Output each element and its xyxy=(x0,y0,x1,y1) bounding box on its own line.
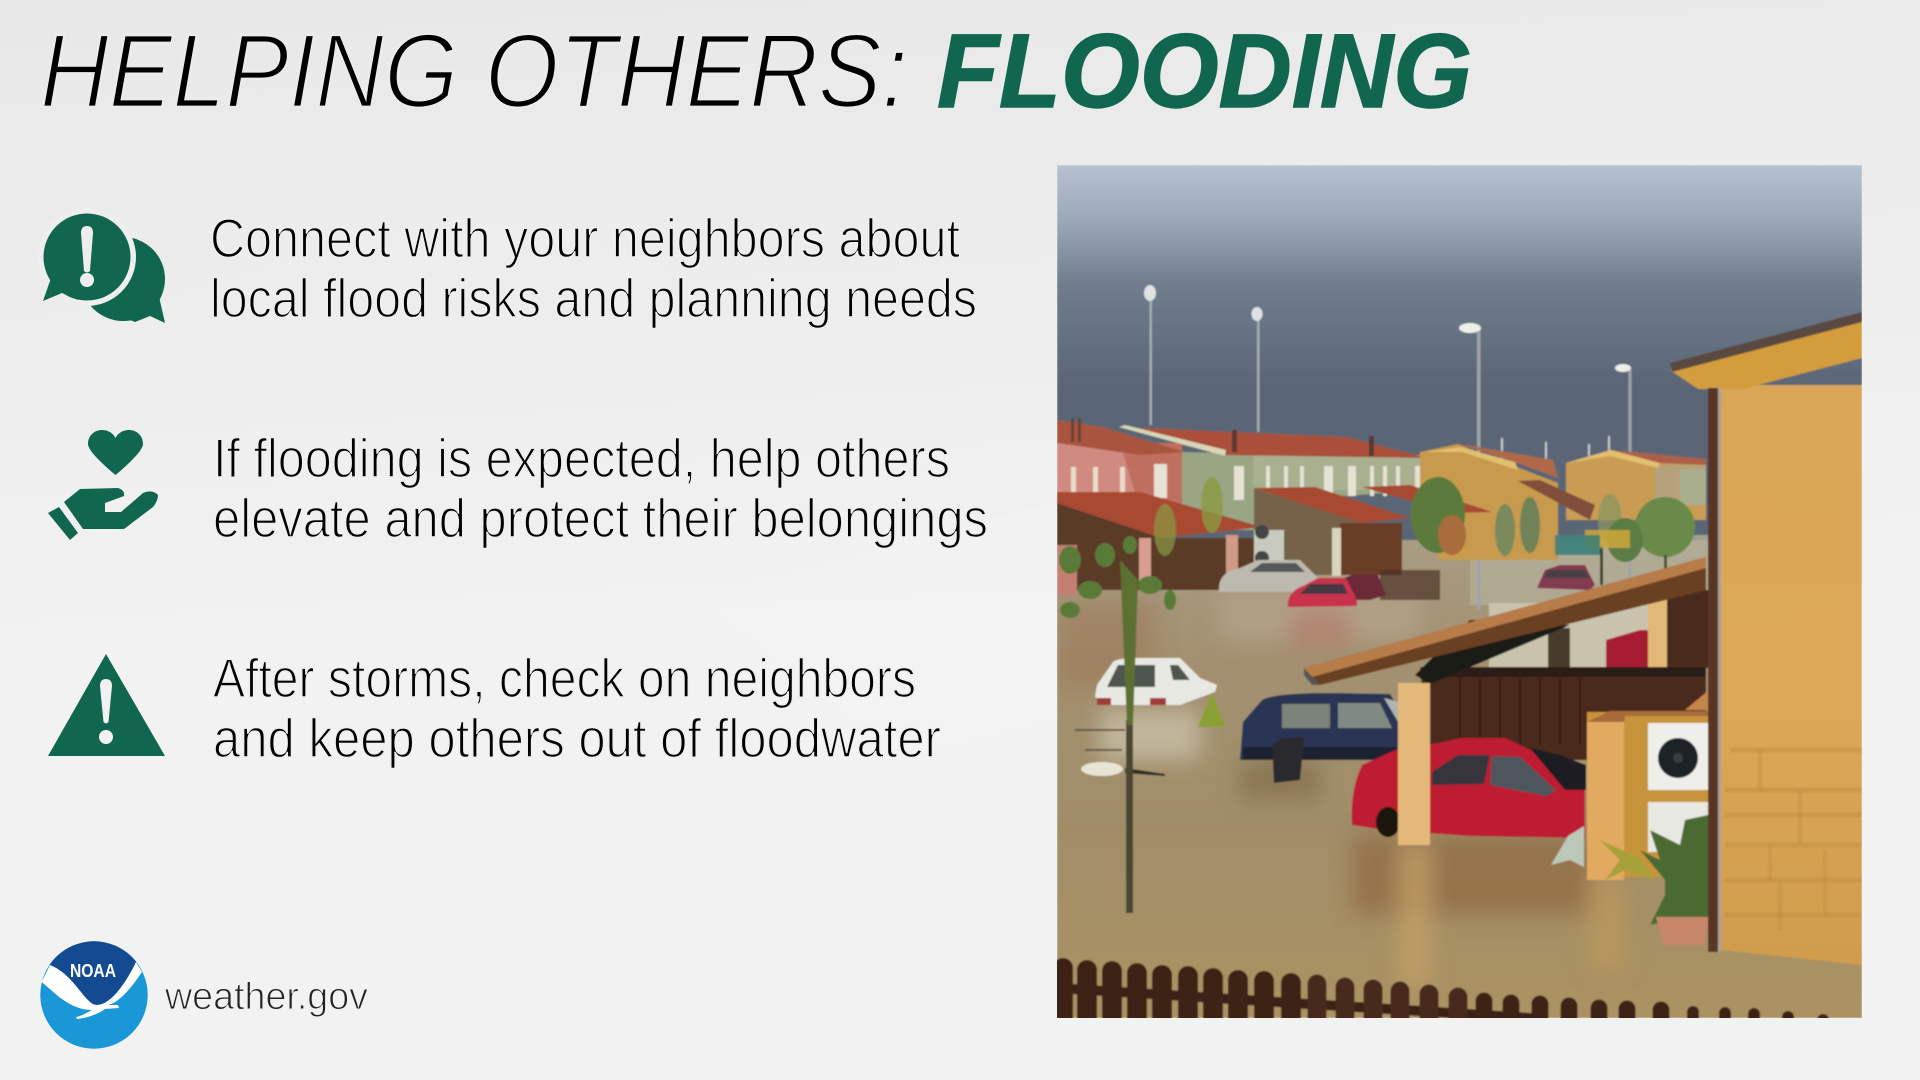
photo carport background gap and rear car xyxy=(1489,590,1709,670)
text: help others elevate belongings: elevate and protect their belongings xyxy=(213,487,988,549)
photo blue car xyxy=(1240,693,1400,783)
photo sky xyxy=(1057,165,1862,565)
text: connect with neighbors: local flood risks and planning needs xyxy=(210,267,977,329)
photo background trees xyxy=(1154,477,1695,600)
photo floating debris xyxy=(1081,762,1165,776)
text: weather.gov: weather.gov xyxy=(164,976,368,1018)
text: check on neighbors: After storms, check on neighbors xyxy=(213,647,916,709)
text: check on neighbors xyxy=(213,647,941,769)
photo carport pillar xyxy=(1398,683,1430,845)
photo pink house xyxy=(1057,418,1185,510)
text: connect with neighbors: Connect with your neighbors about xyxy=(210,207,960,269)
photo air conditioners xyxy=(1648,723,1709,852)
photo green cone shrub xyxy=(1198,692,1225,727)
text: help others elevate belongings: If flooding is expected, help others xyxy=(213,427,950,489)
icon: chat bubbles with exclamation mark xyxy=(38,208,165,323)
photo street lights xyxy=(1144,285,1632,610)
text: connect with neighbors xyxy=(210,207,977,329)
photo floodwater xyxy=(1057,540,1862,1018)
photo distant flooded cars xyxy=(1219,530,1630,607)
title: FLOODING xyxy=(937,13,1472,130)
photo wooden fence xyxy=(1057,968,1823,1030)
photo yellow houses xyxy=(1420,444,1706,560)
title xyxy=(40,13,1472,130)
photo potted palm xyxy=(1600,815,1720,945)
photo wooden carport wall xyxy=(1420,667,1706,760)
photo carport roof xyxy=(1304,557,1706,685)
photo carports xyxy=(1057,485,1492,595)
text: check on neighbors: and keep others out of floodwater xyxy=(213,707,941,769)
title: HELPING OTHERS: xyxy=(40,13,908,130)
photo sapling tree xyxy=(1059,536,1176,913)
photo red car xyxy=(1352,738,1586,838)
NOAA logo xyxy=(40,941,148,1049)
photo yellow house at right xyxy=(1670,312,1862,965)
photo: flooded neighborhood xyxy=(1057,165,1862,1030)
photo yellow utility block xyxy=(1587,690,1709,880)
icon: heart over open hand xyxy=(48,430,158,540)
photo green house xyxy=(1119,425,1428,530)
photo white car xyxy=(1095,658,1217,705)
icon: warning triangle xyxy=(48,654,165,756)
photo reflections xyxy=(1057,590,1624,985)
photo pool chair xyxy=(1551,826,1584,867)
text: help others elevate belongings xyxy=(213,427,988,549)
NOAA logo: NOAA xyxy=(70,961,116,981)
